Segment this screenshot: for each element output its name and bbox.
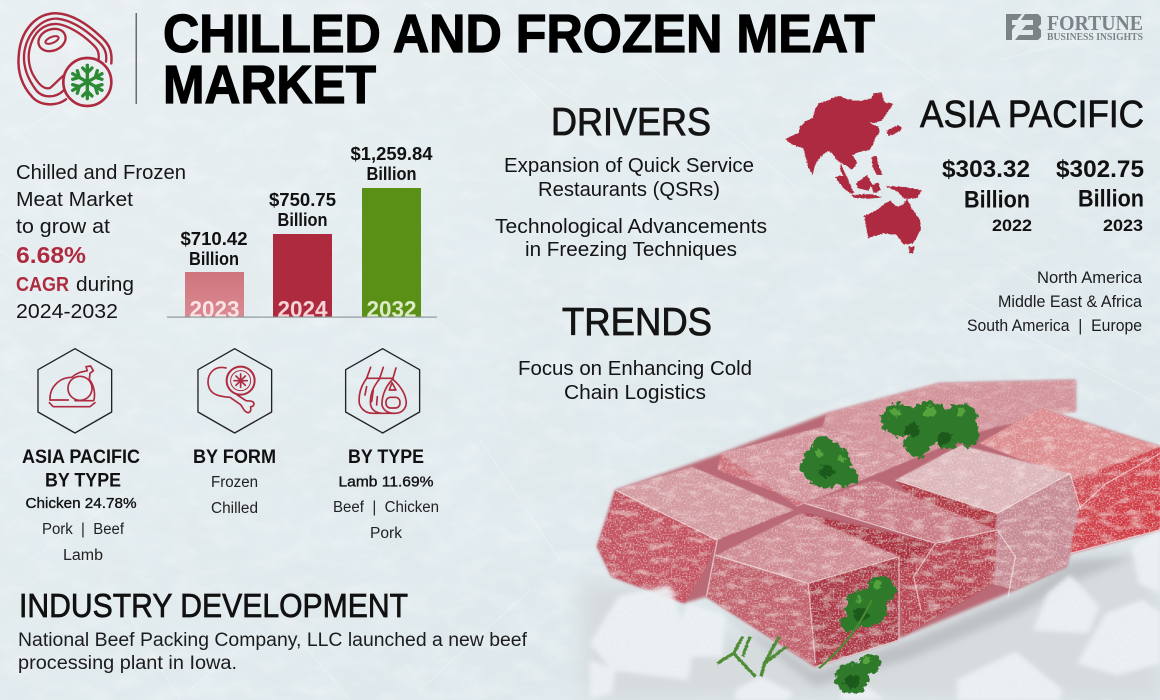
panel: drivers: Expansion of Quick Service: [504, 154, 754, 177]
panel: drivers: in Freezing Techniques: [525, 238, 737, 261]
title: MARKET: [163, 55, 376, 115]
photo: frozen meat blocks on ice: [583, 380, 1160, 700]
panel: by form: [193, 447, 276, 517]
value 2022: $303.32: [942, 156, 1030, 183]
panel: by type: [333, 447, 439, 542]
panel: Asia Pacific values: [920, 94, 1144, 235]
bar 2023: $710.42: [180, 228, 248, 249]
bar 2023: 2023: [190, 296, 240, 322]
panel: Asia Pacific by type: Lamb: [63, 547, 103, 564]
bar 2032: Billion: [366, 163, 416, 184]
bar 2032: $1,259.84: [350, 143, 433, 164]
parsley sprigs: [799, 402, 979, 694]
panel: by type: Pork: [370, 525, 402, 542]
panel: drivers: Technological Advancements: [495, 215, 767, 238]
panel: drivers: Restaurants (QSRs): [538, 178, 720, 201]
icon: lamb rack in hexagon: [346, 349, 420, 433]
right block: [895, 445, 1079, 590]
panel: market growth text: to grow at: [16, 215, 110, 238]
panel: drivers: [495, 101, 767, 261]
panel: by type: Beef | Chicken: [333, 499, 439, 516]
title: CHILLED AND FROZEN MEAT: [163, 4, 875, 64]
panel: industry development: INDUSTRY DEVELOPMENT: [19, 587, 408, 624]
icon: frozen drumstick in hexagon: [198, 349, 272, 433]
panel: by form: BY FORM: [193, 447, 276, 468]
bar 2023: Billion: [189, 248, 239, 269]
meat base silhouette: [597, 380, 1160, 667]
panel: trends: Chain Logistics: [564, 381, 706, 404]
value 2022: Billion: [964, 186, 1030, 214]
panel: by type: Lamb 11.69%: [338, 474, 434, 490]
logo: Fortune Business Insights: FORTUNE: [1047, 11, 1143, 35]
value 2022: [942, 156, 1032, 235]
panel: market growth text: [16, 161, 186, 323]
panel: market growth text: CAGR: [16, 273, 69, 296]
panel: by form: Chilled: [211, 500, 258, 517]
panel: market growth text: Meat Market: [16, 188, 133, 211]
icon: chicken in hexagon: [38, 349, 112, 433]
ice cubes: [590, 530, 1160, 700]
panel: Asia Pacific values: ASIA PACIFIC: [920, 94, 1144, 136]
value 2023: $302.75: [1056, 156, 1144, 183]
panel: by form: Frozen: [211, 474, 258, 491]
bar 2024: [269, 189, 336, 322]
panel: Asia Pacific by type: [22, 447, 140, 564]
panel: industry development: processing plant in Iowa.: [18, 653, 237, 674]
back middle block: [717, 427, 910, 507]
panel: Asia Pacific by type: Chicken 24.78%: [26, 495, 136, 512]
value 2022: 2022: [992, 216, 1032, 235]
thin sprig: [717, 637, 786, 677]
bar chart: market size: [167, 143, 437, 322]
title: [163, 4, 875, 115]
bar 2023: [180, 228, 248, 322]
panel: Asia Pacific by type: BY TYPE: [45, 470, 121, 492]
value 2023: Billion: [1078, 186, 1144, 212]
plastic wrap highlights: [615, 453, 1160, 667]
value 2023: [1056, 156, 1144, 235]
panel: drivers: DRIVERS: [551, 101, 711, 144]
back blocks: [823, 380, 1075, 460]
panel: trends: TRENDS: [562, 301, 712, 344]
center block: [805, 480, 997, 637]
panel: Asia Pacific by type: ASIA PACIFIC: [22, 447, 140, 468]
bar 2024: $750.75: [269, 189, 336, 210]
bar 2032: 2032: [366, 296, 416, 322]
bar 2024: 2024: [278, 296, 328, 322]
panel: trends: Focus on Enhancing Cold: [518, 357, 752, 380]
panel: market growth text: 6.68%: [16, 242, 86, 268]
panel: industry development: [18, 587, 528, 674]
front block: [706, 513, 899, 667]
panel: other regions: South America | Europe: [967, 317, 1142, 335]
panel: trends: [518, 301, 752, 404]
panel: other regions: Middle East & Africa: [998, 293, 1143, 311]
divider: [136, 13, 137, 104]
icon: steak with snowflake logo: [18, 13, 112, 106]
panel: other regions: North America: [1037, 269, 1143, 287]
panel: by type: BY TYPE: [348, 447, 424, 468]
panel: market growth text: 2024-2032: [16, 300, 118, 323]
value 2023: 2023: [1103, 216, 1143, 235]
panel: other regions: [967, 269, 1143, 335]
bar 2032: [350, 143, 433, 322]
left block: [597, 467, 794, 603]
bar 2024: Billion: [278, 209, 328, 230]
floor shadow under blocks: [706, 557, 1135, 687]
far right block: [979, 408, 1160, 553]
panel: market growth text: Chilled and Frozen: [16, 161, 186, 184]
logo: Fortune Business Insights: [1006, 11, 1143, 43]
panel: market growth text: during: [76, 273, 134, 296]
logo: Fortune Business Insights: BUSINESS INSIGHTS: [1047, 32, 1143, 43]
panel: industry development: National Beef Packing Company, LLC launched a new beef: [18, 630, 528, 651]
panel: Asia Pacific by type: Pork | Beef: [42, 521, 125, 538]
map: Asia Pacific: [785, 92, 922, 253]
